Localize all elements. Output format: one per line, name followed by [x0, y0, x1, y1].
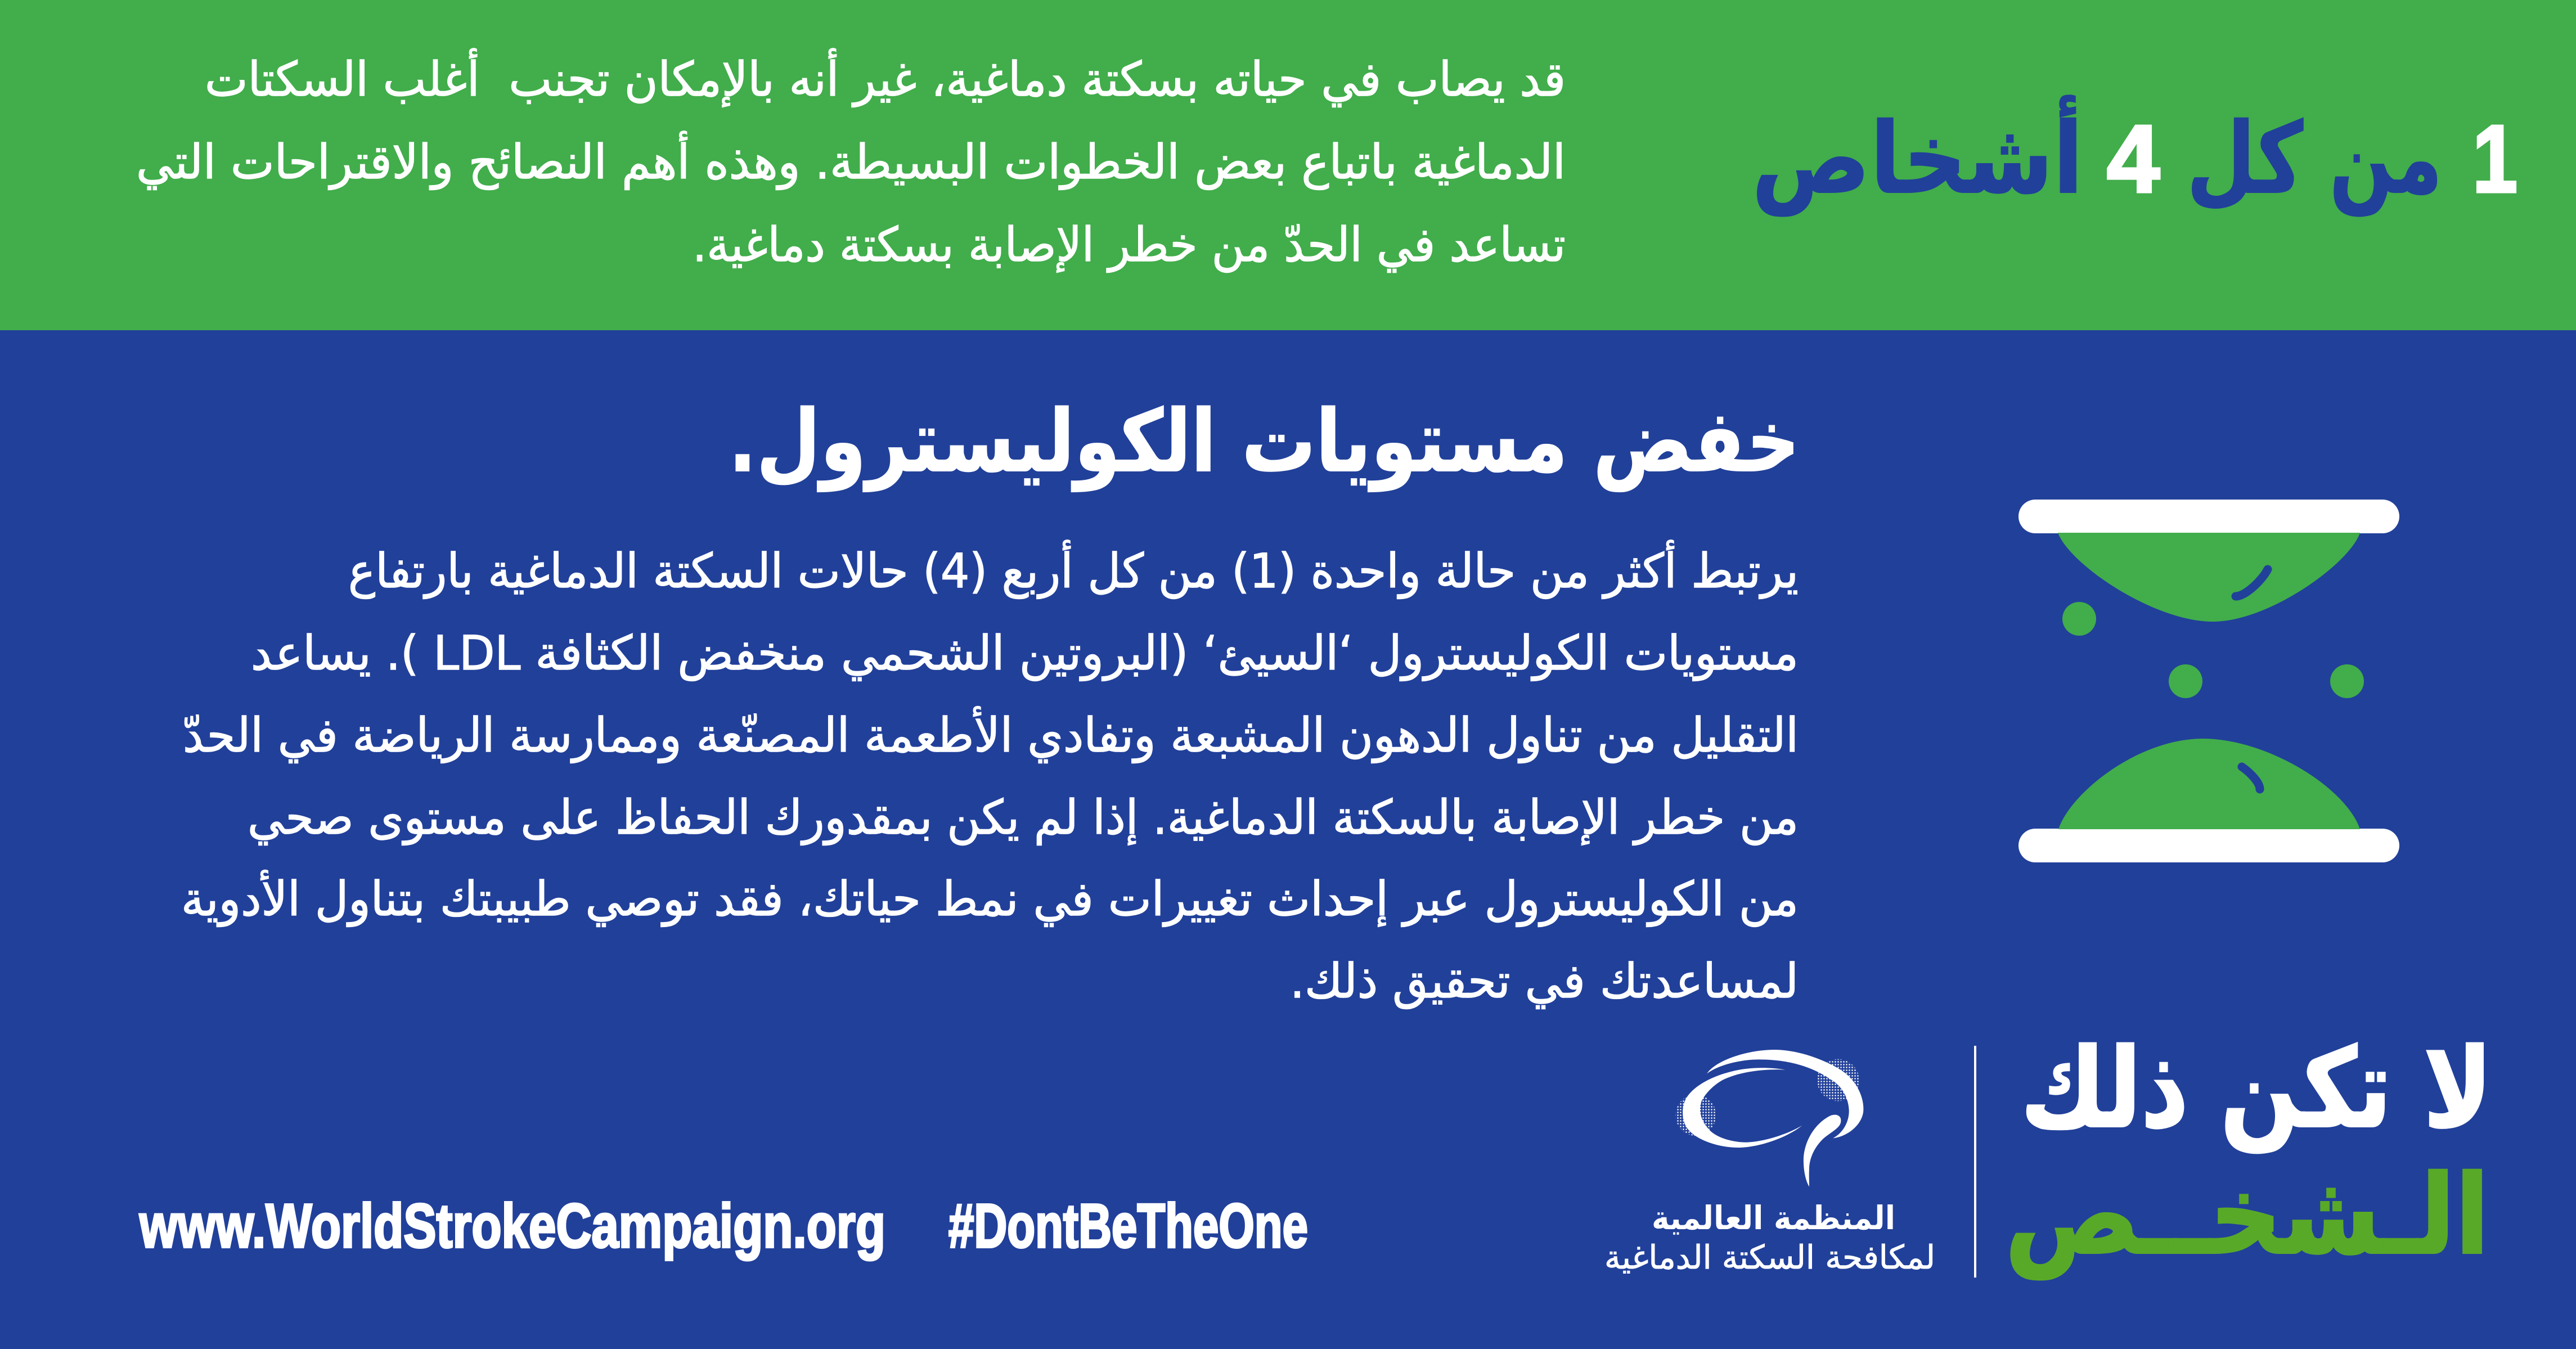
body paragraph: من خطر الإصابة بالسكتة الدماغية. إذا لم يكن بمقدورك الحفاظ على مستوى صحي: [248, 790, 1799, 846]
intro paragraph: تساعد في الحدّ من خطر الإصابة بسكتة دماغية.: [693, 217, 1566, 273]
panel: green top banner: [0, 0, 2576, 330]
body paragraph: من الكوليسترول عبر إحداث تغييرات في نمط حياتك، فقد توصي طبيبتك بتناول الأدوية: [181, 870, 1799, 927]
icon: hourglass: [2018, 500, 2399, 862]
campaign lockup: don't be the one: لا تكن ذلك: [2021, 1025, 2492, 1153]
headline: 1 in 4 people: كل: [2187, 102, 2304, 216]
bottom bar: [2018, 829, 2399, 862]
brain mark: [1675, 1050, 1863, 1186]
logo: World Stroke Organization: [1604, 1050, 1935, 1276]
headline: 1 in 4 people: [1752, 95, 2517, 217]
hashtag: #DontBeTheOne: [948, 1191, 1308, 1261]
organisation name: لمكافحة السكتة الدماغية: [1604, 1238, 1935, 1276]
campaign lockup: don't be the one: الـشخــص: [2005, 1152, 2489, 1280]
body paragraph: مستويات الكوليسترول ‘السيئ‘ (البروتين الشحمي منخفض الكثافة LDL ). يساعد: [251, 626, 1799, 681]
organisation name: [1604, 1199, 1935, 1276]
headline: 1 in 4 people: من: [2330, 102, 2442, 217]
campaign lockup: don't be the one: [2005, 1025, 2492, 1280]
body paragraph: [181, 540, 1799, 1009]
organisation name: المنظمة العالمية: [1652, 1199, 1895, 1237]
headline: 1 in 4 people: 1: [2472, 106, 2517, 213]
lower green mound: [2058, 739, 2360, 829]
intro paragraph: الدماغية باتباع بعض الخطوات البسيطة. وهذه أهم النصائح والاقتراحات التي: [136, 131, 1566, 190]
top bar: [2018, 500, 2399, 533]
heading: lower cholesterol levels: خفض مستويات الكوليسترول.: [729, 392, 1800, 492]
upper green bulb: [2058, 533, 2360, 622]
intro paragraph: قد يصاب في حياته بسكتة دماغية، غير أنه بالإمكان تجنب أغلب السكتات: [205, 48, 1566, 107]
upper highlight: [2236, 569, 2268, 596]
headline: 1 in 4 people: أشخاص: [1752, 95, 2083, 217]
intro paragraph: [136, 48, 1566, 273]
body paragraph: يرتبط أكثر من حالة واحدة (1) من كل أربع (4) حالات السكتة الدماغية بارتفاع: [348, 540, 1799, 599]
lower highlight: [2242, 767, 2260, 789]
body paragraph: لمساعدتك في تحقيق ذلك.: [1290, 954, 1799, 1009]
headline: 1 in 4 people: 4: [2107, 106, 2160, 213]
body paragraph: التقليل من تناول الدهون المشبعة وتفادي الأطعمة المصنّعة وممارسة الرياضة في الحدّ: [183, 706, 1799, 763]
divider: [1974, 1046, 1976, 1278]
falling drops: [2062, 602, 2364, 698]
website url: www.WorldStrokeCampaign.org: [139, 1191, 885, 1261]
